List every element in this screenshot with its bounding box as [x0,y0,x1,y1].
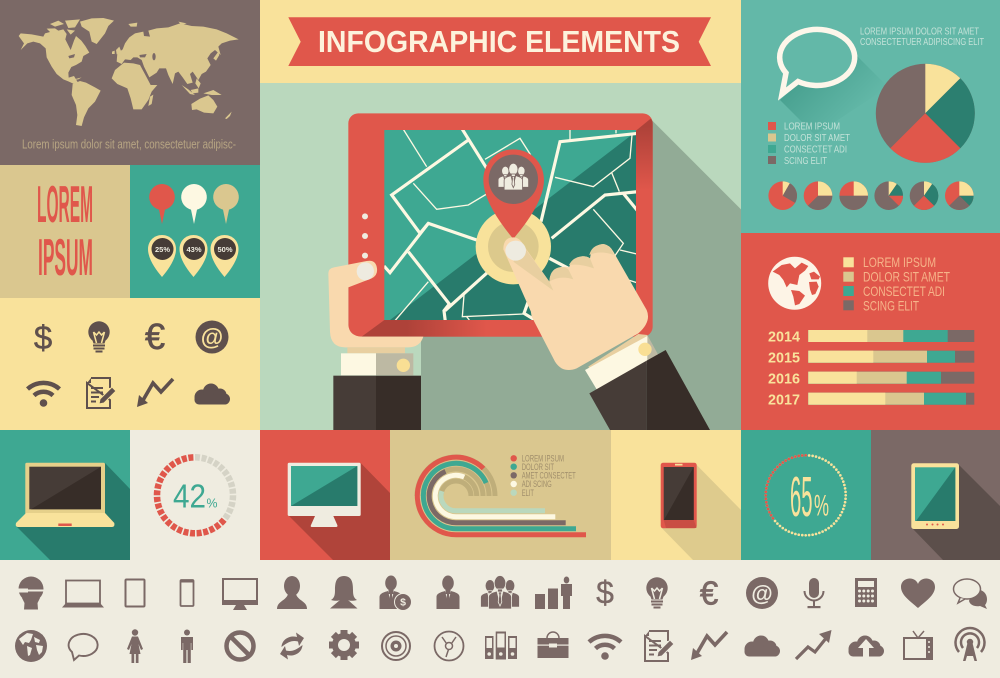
icon: at sign [746,577,778,609]
bar chart [768,329,974,409]
icon: falling arrow [137,379,173,407]
icon: rising arrow [796,630,832,659]
icon: round pins [149,184,239,224]
icon: bulb [88,321,110,352]
icon: globe [15,630,47,662]
panel: icon strip [0,560,1000,678]
laptop shadow [16,463,130,560]
legend: DOLOR SIT [522,462,554,472]
icon: at sign: @ [201,324,223,350]
location pin [483,149,544,239]
value: 42 [173,478,206,514]
icon: speech bubble [69,634,98,660]
legend: LOREM IPSUM [784,120,840,132]
panel: monitor [260,430,390,560]
icon: cloud upload [848,636,884,657]
icon: monitor [288,463,361,527]
arc chart [417,457,586,535]
icon: tablet [126,580,144,606]
icon: heart [901,578,935,608]
icon: clock dial [434,632,464,660]
icon: note [645,631,674,661]
speech bubble shadow [780,42,888,135]
panel: map pins [130,165,260,298]
icon: speech bubble [780,29,855,94]
icon: falling arrow [691,632,727,660]
legend: ELIT [522,488,534,498]
percent sign: % [814,490,829,522]
icon: laptop [62,580,104,608]
tablet [348,113,653,337]
panel: stacked bars [741,233,1000,430]
icon: cloud [744,636,780,656]
world map [19,18,239,126]
panel: laptop [0,430,130,560]
bar chart: 2017 [768,392,800,409]
icon: percentage pins: 50% [217,245,233,254]
icon: refresh [280,632,304,660]
icon: target [382,632,410,660]
icon: wifi [589,636,621,660]
icon: man bust [277,576,307,609]
panel: arc chart [390,430,611,560]
icon: gear [329,630,359,660]
panel: 65 percent ring [741,430,871,560]
icon: growth bars with man [535,576,572,609]
icon: calculator [855,578,877,607]
icon: wifi [28,383,60,407]
icon: no sign [226,632,254,660]
panel: lorem ipsum [0,165,130,298]
panel: world map [0,0,260,165]
panel: title [260,0,741,83]
right hand [503,237,710,430]
title: INFOGRAPHIC ELEMENTS [318,25,680,59]
dotted ring [766,455,846,535]
icon: woman figure [127,629,143,663]
panel: icon grid [0,298,260,430]
legend: LOREM IPSUM [863,254,936,270]
map caption: Lorem ipsum dolor sit amet, consectetuer adipisc- [22,136,236,152]
icon: television [904,631,932,659]
legend [510,454,576,498]
heading text [860,26,984,48]
panel: tablet scene [260,83,741,430]
legend: CONSECTET ADI [784,144,847,156]
icon: phone [661,463,697,528]
icon: at sign [196,320,228,354]
tablet long shadow [421,120,741,430]
panel: 65 percent ring: 65 [790,465,812,529]
icon: percentage pins: 43% [186,245,202,254]
legend: SCING ELIT [784,155,827,167]
icon: people [498,163,529,190]
icon: euro: € [145,316,165,357]
left hand [328,261,423,430]
icon: globe [768,257,821,310]
phone shadow [662,465,741,560]
icon: briefcase [538,632,568,658]
map screen [384,129,638,322]
icon: bulb [646,577,668,608]
legend: ADI SCING [522,479,552,489]
icon: chat bubbles [954,579,987,609]
legend: CONSECTET ADI [863,283,945,299]
tablet shadow [913,465,1000,560]
icon: note [87,378,116,408]
monitor shadow [288,463,390,560]
bar chart: 2014 [768,329,801,346]
legend: DOLOR SIT AMET [863,268,950,284]
text: LOREM [37,176,93,234]
icon: percentage pins: 25% [155,245,170,254]
icon: percentage pins [148,235,238,277]
icon: dollar: $ [34,319,52,356]
icon: businessman with dollar [380,576,412,610]
legend: AMET CONSECTET [522,470,576,480]
legend: LOREM IPSUM [522,454,564,464]
icon: monitor [222,578,258,610]
icon: antenna [956,628,984,661]
icon: binders [485,632,517,660]
title ribbon [288,17,711,66]
percent sign: % [206,496,218,510]
legend [843,254,950,314]
icon: laptop [16,463,114,527]
panel: tablet [871,430,1000,560]
icon: cloud [194,384,230,404]
progress ring [157,457,233,533]
bar chart: 2016 [768,371,800,388]
icon: microphone [804,578,824,608]
icon: business group [481,576,519,609]
icon: businessman [436,576,460,609]
panel: lorem ipsum: IPSUM [38,229,93,287]
heading: lorem ipsum [37,176,93,287]
bar chart: 2015 [768,350,800,367]
icon: woman bust [330,576,358,608]
icon: tablet [911,463,959,529]
icon: businessman with dollar: $ [400,596,406,608]
panel: phone [611,430,741,560]
large pie chart [876,64,975,163]
legend: SCING ELIT [863,298,919,314]
legend: DOLOR SIT AMET [784,132,850,144]
panel: 42 percent ring [130,430,260,560]
icon: euro: € [700,574,718,612]
icon: phone [180,580,194,606]
legend [768,120,850,167]
icon: smart glasses head [18,576,44,610]
icon: at sign: @ [751,581,773,606]
icon: man figure [181,630,193,663]
panel: pie charts [741,0,1000,233]
icon: dollar: $ [596,574,614,610]
small pie charts [768,181,974,210]
